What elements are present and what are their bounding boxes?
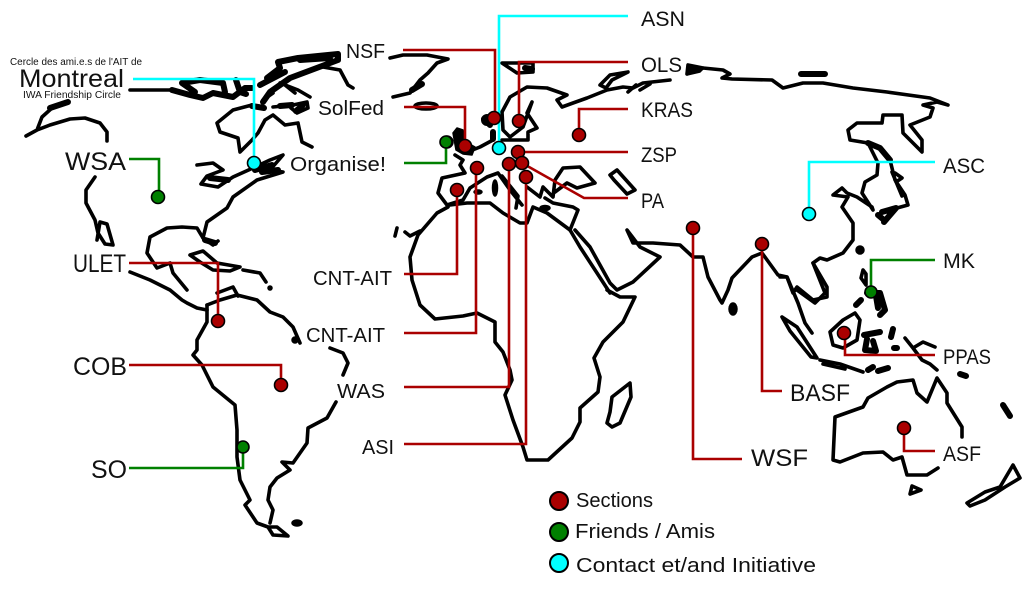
labels: Americas xyxy=(65,148,127,484)
labels: left of Africa: CNT-AIT xyxy=(306,325,385,347)
labels: Asia Pacific: MK xyxy=(943,250,975,273)
legend: Friends / Amis xyxy=(575,521,715,543)
labels: Americas: ULET xyxy=(73,250,126,278)
legend xyxy=(550,490,816,577)
labels: Europe right column: OLS xyxy=(641,54,682,77)
Europe and Asia coast xyxy=(438,63,948,333)
Africa coast xyxy=(395,203,635,460)
label: Montreal friendship circle: Montreal xyxy=(19,65,124,93)
label: Montreal friendship circle: IWA Friendship Circle xyxy=(23,90,121,101)
Greenland and Iceland xyxy=(390,55,448,109)
legend: Contact et/and Initiative xyxy=(576,555,816,577)
labels: left of Africa: CNT-AIT xyxy=(313,268,392,290)
Australia and New Zealand coast xyxy=(833,378,1020,506)
labels: Europe right column: ZSP xyxy=(641,144,677,167)
labels: Americas: COB xyxy=(73,353,127,381)
labels: Asia Pacific: ASC xyxy=(943,155,985,178)
labels: Europe right column: KRAS xyxy=(641,99,693,122)
labels: Asia Pacific: ASF xyxy=(943,443,981,466)
labels: left of Africa xyxy=(290,41,394,459)
labels: Europe right column xyxy=(641,8,693,213)
labels: Europe right column: ASN xyxy=(641,8,685,31)
labels: Americas: SO xyxy=(91,456,127,484)
labels: Americas: WSA xyxy=(65,148,126,176)
label: Montreal friendship circle xyxy=(10,57,142,101)
labels: Asia Pacific: WSF xyxy=(751,445,808,472)
legend: Sections xyxy=(576,490,653,512)
labels: Asia Pacific xyxy=(751,155,991,472)
North America coast xyxy=(26,54,353,310)
label: Montreal friendship circle: Cercle des ami.e.s de l'AIT de xyxy=(10,57,142,68)
connector lines xyxy=(129,16,935,468)
labels: Asia Pacific: BASF xyxy=(790,380,850,407)
labels: Europe right column: PA xyxy=(641,190,664,213)
labels: left of Africa: NSF xyxy=(346,41,385,63)
labels: left of Africa: Organise! xyxy=(290,154,386,176)
South America coast xyxy=(193,287,348,536)
labels: left of Africa: SolFed xyxy=(318,98,384,120)
labels: Asia Pacific: PPAS xyxy=(943,346,991,369)
world map coastlines xyxy=(26,54,1020,536)
labels: left of Africa: ASI xyxy=(362,437,394,459)
Southeast Asia islands xyxy=(782,270,966,376)
labels: left of Africa: WAS xyxy=(337,381,385,403)
location markers xyxy=(152,112,910,453)
